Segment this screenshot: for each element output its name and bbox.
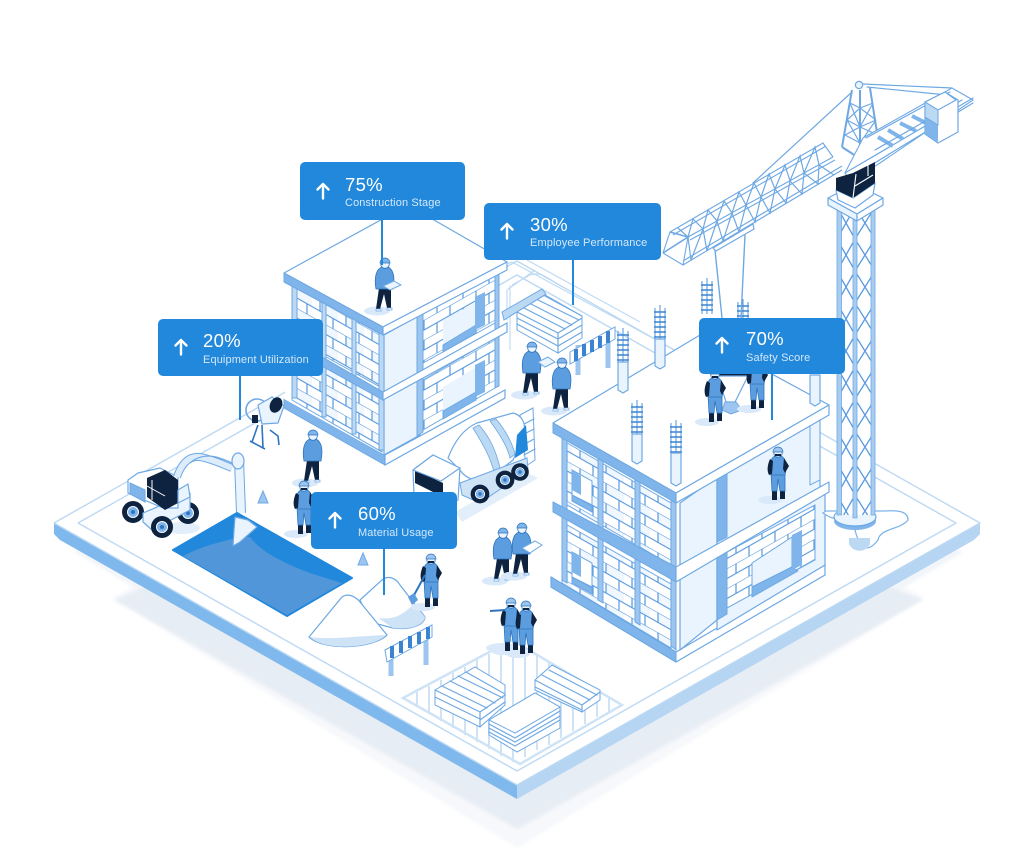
truck drum xyxy=(448,413,524,481)
crane counter jib xyxy=(845,88,973,180)
truck chassis xyxy=(460,458,528,503)
label: construction stage: 75% xyxy=(345,174,383,195)
crouching worker xyxy=(284,481,315,538)
stem: material usage xyxy=(383,549,385,595)
label: safety score: Safety Score xyxy=(746,352,810,364)
crane stay cables xyxy=(753,84,952,183)
crane mast xyxy=(837,207,875,518)
ground shadow under platform xyxy=(74,380,964,848)
worker on building 2 floor xyxy=(758,447,789,504)
stem: equipment utilization xyxy=(239,376,241,420)
building 2 brick right face lower xyxy=(727,505,815,608)
building 2 roof xyxy=(553,335,829,493)
label: employee performance xyxy=(484,203,661,260)
building 2, front right xyxy=(551,335,829,662)
building 1, back left xyxy=(284,205,507,465)
two supervising workers xyxy=(486,598,537,658)
label: material usage: 60% xyxy=(358,503,396,524)
label: equipment utilization: Equipment Utilization xyxy=(203,354,309,366)
building 1 left columns xyxy=(292,283,384,450)
building 2 light walls xyxy=(680,477,717,650)
crane base foot xyxy=(823,508,908,551)
barricade near pallet xyxy=(570,327,615,375)
stem: safety score xyxy=(771,374,773,420)
crane cab xyxy=(836,162,875,208)
building 1 brick right face upper xyxy=(423,273,495,363)
label: employee performance: Employee Performance xyxy=(530,237,647,249)
two workers with plan xyxy=(482,523,542,586)
building 2 mid slab xyxy=(553,502,676,582)
back yard fence behind building xyxy=(502,260,660,350)
crane upper tower xyxy=(842,81,880,160)
pipe stack right xyxy=(535,665,600,712)
walking worker xyxy=(292,430,322,488)
building 2 columns right xyxy=(717,472,727,620)
cement mixer xyxy=(246,395,285,449)
excavator xyxy=(122,453,244,538)
pipe stack left xyxy=(435,667,505,727)
stem: construction stage xyxy=(381,220,383,265)
building 1 window upper xyxy=(443,292,485,352)
building 2 brick left upper xyxy=(562,440,671,565)
building 2 large window xyxy=(752,530,802,597)
building 1 base xyxy=(284,390,505,465)
label: construction stage: Construction Stage xyxy=(345,197,441,209)
shovel worker xyxy=(408,554,442,611)
crane slewing platform xyxy=(828,184,883,214)
excavator boom xyxy=(177,457,232,477)
building 2 left-window openings xyxy=(572,470,592,594)
sand piles xyxy=(309,578,425,647)
excavator body xyxy=(128,468,178,508)
platform inner border xyxy=(78,275,956,771)
building 2 left columns xyxy=(562,436,676,650)
label: safety score xyxy=(699,318,845,374)
platform base slab xyxy=(54,261,980,799)
building 1 roof slab xyxy=(284,205,507,327)
building 1 brick left face upper xyxy=(292,285,382,388)
truck cab xyxy=(413,455,460,510)
building 1 window lower xyxy=(443,360,485,419)
rebar columns on roof xyxy=(617,278,820,486)
excavator bucket xyxy=(233,517,257,546)
stem: employee performance xyxy=(572,260,574,305)
building 1 brick left face lower xyxy=(292,345,382,452)
traffic cones xyxy=(258,491,368,565)
workers near pallet xyxy=(511,342,571,416)
workers with concrete bucket on roof xyxy=(695,356,768,426)
worker on roof with plan xyxy=(364,258,401,316)
label: safety score: 70% xyxy=(746,328,784,349)
label: material usage: Material Usage xyxy=(358,527,434,539)
building 1 light side walls xyxy=(384,315,420,455)
truck ladder xyxy=(520,408,535,466)
label: equipment utilization xyxy=(158,319,323,376)
building 1 mid slab xyxy=(284,335,383,400)
building 2 brick left lower xyxy=(562,522,671,648)
building 2 base xyxy=(551,565,825,662)
material yard xyxy=(403,640,622,764)
label: equipment utilization: 20% xyxy=(203,330,241,351)
crane xyxy=(663,81,973,551)
crane jib truss xyxy=(663,143,842,265)
crane hoist cables xyxy=(715,235,745,318)
concrete mixer truck xyxy=(413,408,538,522)
excavation pit xyxy=(173,513,352,616)
pipe pallet xyxy=(517,295,582,353)
label: construction stage xyxy=(300,162,465,220)
label: employee performance: 30% xyxy=(530,214,568,235)
plate stack xyxy=(489,693,560,752)
label: material usage xyxy=(311,492,457,549)
barricade front xyxy=(385,625,432,676)
building 1 right columns xyxy=(417,269,499,436)
building 1 brick right face lower xyxy=(423,338,495,430)
